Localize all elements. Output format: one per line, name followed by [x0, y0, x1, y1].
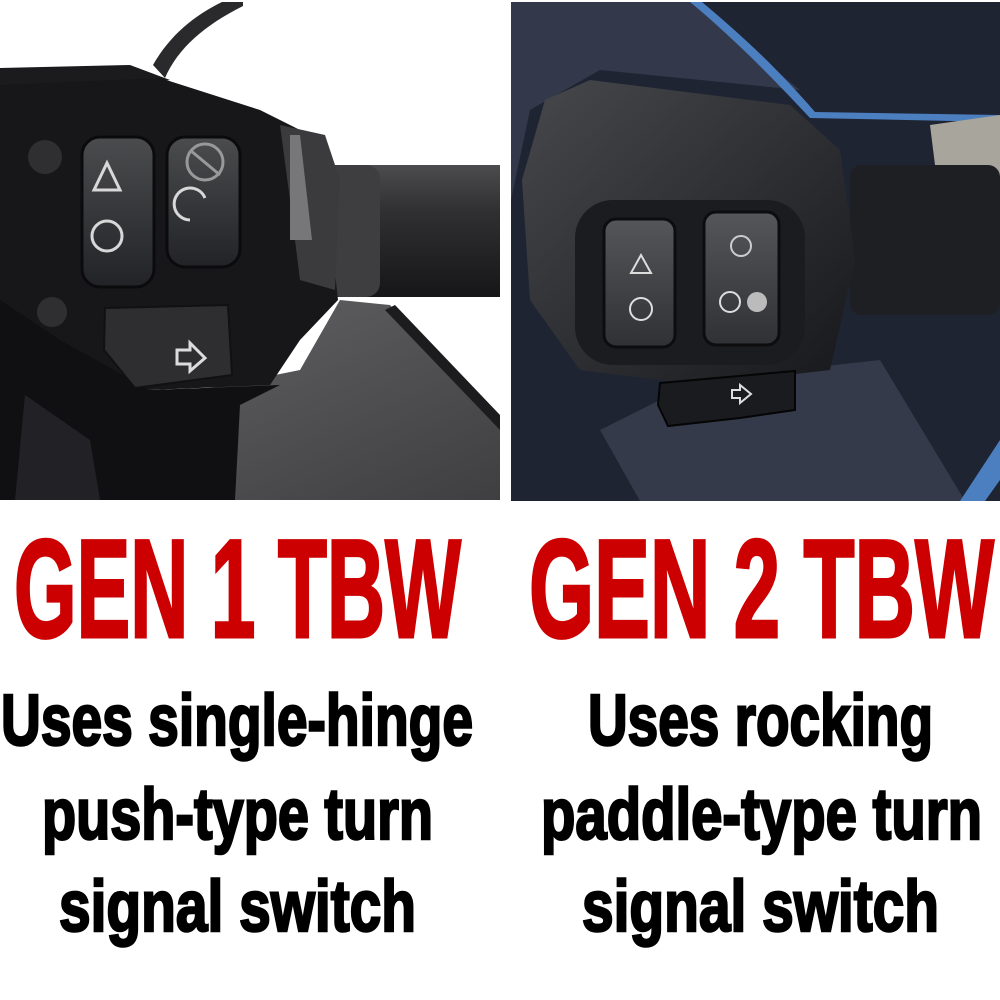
photo: gen 2 switch — [511, 2, 1000, 501]
text: gen 1 description — [1, 681, 473, 947]
text: gen 2 description — [541, 681, 982, 947]
photo: gen 1 switch — [0, 0, 500, 500]
text: gen 1 description: push-type turn — [42, 775, 433, 855]
heading: GEN 1 TBW: GEN 1 TBW — [14, 510, 461, 667]
text: gen 1 description: signal switch — [59, 867, 416, 947]
text: gen 1 description: Uses single-hinge — [1, 681, 473, 761]
